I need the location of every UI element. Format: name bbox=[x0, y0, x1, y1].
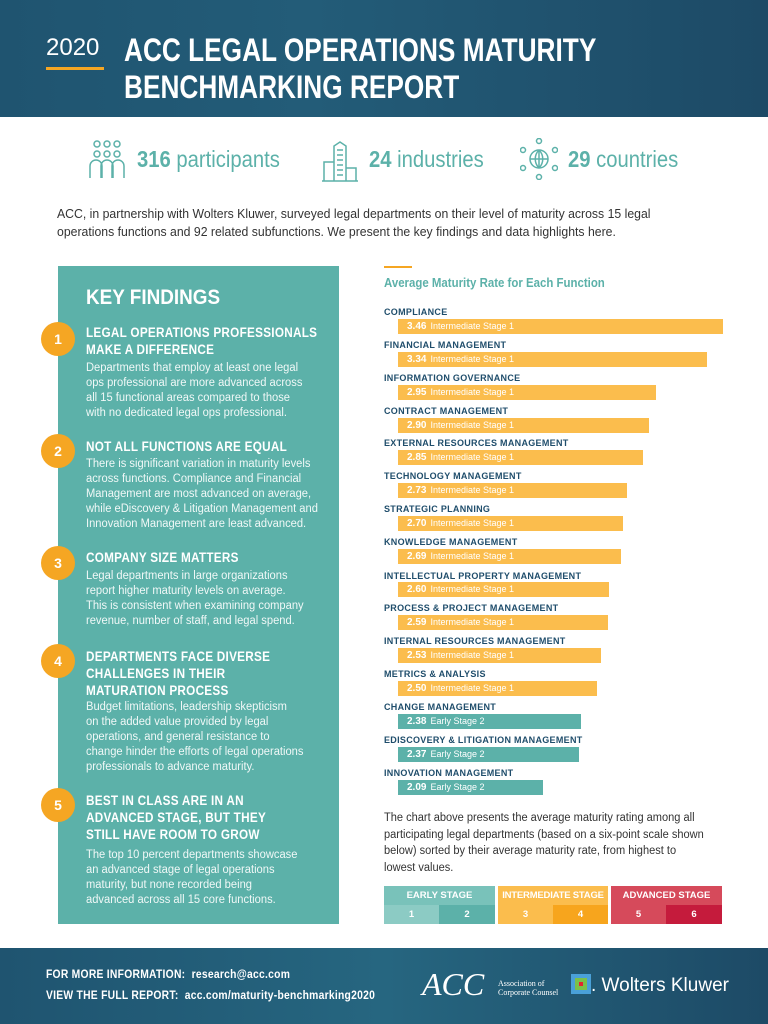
text: 2.53 Intermediate Stage 1 bbox=[407, 650, 514, 661]
panel: key findings: Innovation Management are least advanced. bbox=[86, 518, 306, 530]
text: 2.73 Intermediate Stage 1 bbox=[407, 485, 514, 496]
intro text: ACC, in partnership with Wolters Kluwer, surveyed legal departments on their level of maturity across 15 legal bbox=[57, 207, 650, 221]
text: METRICS & ANALYSIS bbox=[384, 669, 486, 679]
legend: stage scale: 5 bbox=[636, 909, 641, 920]
chart note text: The chart above presents the average maturity rating among all bbox=[384, 812, 695, 824]
panel: key findings: professionals to advance maturity. bbox=[86, 761, 254, 773]
text: PROCESS & PROJECT MANAGEMENT bbox=[384, 603, 558, 613]
text: FINANCIAL MANAGEMENT bbox=[384, 340, 506, 350]
chart note text bbox=[384, 812, 704, 874]
text: INNOVATION MANAGEMENT bbox=[384, 768, 513, 778]
text: 2.37 Early Stage 2 bbox=[407, 749, 484, 760]
legend: stage scale: ADVANCED STAGE bbox=[623, 890, 710, 901]
panel: key findings: report higher maturity levels on average. bbox=[86, 585, 286, 597]
footer contact text: VIEW THE FULL REPORT: acc.com/maturity-benchmarking2020 bbox=[46, 988, 375, 1002]
text: 2.60 Intermediate Stage 1 bbox=[407, 584, 514, 595]
panel: key findings: BEST IN CLASS ARE IN AN bbox=[86, 793, 244, 808]
footer contact text bbox=[46, 967, 375, 1002]
panel: key findings: LEGAL OPERATIONS PROFESSIONALS bbox=[86, 325, 317, 340]
panel: key findings: There is significant variation in maturity levels bbox=[86, 458, 310, 470]
panel: key findings: COMPANY SIZE MATTERS bbox=[86, 550, 239, 565]
stat: countries: 29 countries bbox=[568, 146, 678, 172]
panel: key findings: across functions. Compliance and Financial bbox=[86, 473, 301, 485]
text: 5 bbox=[54, 797, 62, 813]
panel: key findings: while eDiscovery & Litigation Management and bbox=[86, 503, 318, 515]
text: 2.50 Intermediate Stage 1 bbox=[407, 683, 514, 694]
panel: key findings: advanced across all 15 core functions. bbox=[86, 894, 276, 906]
legend: stage scale: EARLY STAGE bbox=[407, 890, 472, 901]
panel: key findings: maturity, but none recorded being bbox=[86, 879, 252, 891]
panel: key findings: Legal departments in large organizations bbox=[86, 570, 288, 582]
logo: Wolters Kluwer: . Wolters Kluwer bbox=[591, 975, 729, 996]
text: COMPLIANCE bbox=[384, 307, 448, 317]
text: TECHNOLOGY MANAGEMENT bbox=[384, 471, 522, 481]
chart note text: below) sorted by their average maturity rate, from highest to bbox=[384, 845, 676, 857]
text: STRATEGIC PLANNING bbox=[384, 504, 490, 514]
text: 3.46 Intermediate Stage 1 bbox=[407, 321, 514, 332]
text: INTELLECTUAL PROPERTY MANAGEMENT bbox=[384, 571, 581, 581]
intro text: operations functions and 92 related subfunctions. We present the key findings and data highlights here. bbox=[57, 225, 616, 239]
icon: globe network bbox=[520, 138, 558, 180]
text: CHANGE MANAGEMENT bbox=[384, 702, 496, 712]
stat: industries: 24 industries bbox=[369, 146, 484, 172]
text: 1 bbox=[54, 331, 62, 347]
text: EDISCOVERY & LITIGATION MANAGEMENT bbox=[384, 735, 583, 745]
legend: stage scale: 4 bbox=[578, 909, 583, 920]
stat: participants: 316 participants bbox=[137, 146, 280, 172]
text: 2.38 Early Stage 2 bbox=[407, 716, 484, 727]
panel: key findings: an advanced stage of legal operations bbox=[86, 864, 275, 876]
legend: stage scale bbox=[384, 886, 722, 924]
chart note text: lowest values. bbox=[384, 862, 453, 874]
panel: key findings: This is consistent when examining company bbox=[86, 600, 304, 612]
panel: key findings: Departments that employ at least one legal bbox=[86, 362, 298, 374]
title bbox=[124, 32, 596, 105]
panel: key findings: with no dedicated legal ops professional. bbox=[86, 407, 287, 419]
text: 2.69 Intermediate Stage 1 bbox=[407, 551, 514, 562]
text: 2 bbox=[54, 443, 62, 459]
panel: key findings: Budget limitations, leadership skepticism bbox=[86, 701, 287, 713]
icon: building bbox=[322, 141, 358, 182]
panel: key findings: Management are most advanced on average, bbox=[86, 488, 311, 500]
panel: key findings: all 15 functional areas compared to those bbox=[86, 392, 290, 404]
footer contact text: FOR MORE INFORMATION: research@acc.com bbox=[46, 967, 290, 981]
logo: ACC: Association of bbox=[498, 979, 544, 988]
text: 2.95 Intermediate Stage 1 bbox=[407, 387, 514, 398]
panel: key findings: MAKE A DIFFERENCE bbox=[86, 342, 214, 357]
text: 3.34 Intermediate Stage 1 bbox=[407, 354, 514, 365]
chart title: Average Maturity Rate for Each Function bbox=[384, 275, 605, 290]
text: 4 bbox=[54, 653, 62, 669]
logo: ACC: ACC bbox=[422, 966, 484, 1002]
text: 2.59 Intermediate Stage 1 bbox=[407, 617, 514, 628]
text: 2.09 Early Stage 2 bbox=[407, 782, 484, 793]
panel: key findings: DEPARTMENTS FACE DIVERSE bbox=[86, 649, 270, 664]
legend: stage scale: 2 bbox=[464, 909, 470, 920]
logo: ACC: Corporate Counsel bbox=[498, 988, 558, 997]
stats row bbox=[89, 138, 678, 182]
year: 2020 bbox=[46, 34, 99, 61]
panel: key findings: ops professional are more advanced across bbox=[86, 377, 302, 389]
legend: stage scale: 6 bbox=[691, 909, 697, 920]
heading: KEY FINDINGS bbox=[86, 286, 220, 309]
panel: key findings: NOT ALL FUNCTIONS ARE EQUAL bbox=[86, 439, 287, 454]
panel: key findings: on the added value provided by legal bbox=[86, 716, 268, 728]
chart note text: participating legal departments (based on a six-point scale shown bbox=[384, 828, 704, 840]
text: EXTERNAL RESOURCES MANAGEMENT bbox=[384, 438, 569, 448]
panel: key findings: STILL HAVE ROOM TO GROW bbox=[86, 827, 260, 842]
icon: people bbox=[89, 140, 125, 178]
legend: stage scale: 3 bbox=[523, 909, 528, 920]
panel: key findings: revenue, number of staff, and legal spend. bbox=[86, 615, 295, 627]
year bbox=[46, 34, 104, 70]
panel: key findings: CHALLENGES IN THEIR bbox=[86, 666, 225, 681]
panel: key findings: change hinder the efforts of legal operations bbox=[86, 746, 303, 758]
text: 2.85 Intermediate Stage 1 bbox=[407, 452, 514, 463]
panel: key findings: The top 10 percent departments showcase bbox=[86, 849, 297, 861]
text: 3 bbox=[54, 555, 62, 571]
legend: stage scale: 1 bbox=[409, 909, 414, 920]
text: CONTRACT MANAGEMENT bbox=[384, 406, 508, 416]
text: 2.70 Intermediate Stage 1 bbox=[407, 518, 514, 529]
panel: key findings: MATURATION PROCESS bbox=[86, 683, 229, 698]
text: KNOWLEDGE MANAGEMENT bbox=[384, 537, 518, 547]
title: BENCHMARKING REPORT bbox=[124, 69, 459, 105]
panel: key findings: ADVANCED STAGE, BUT THEY bbox=[86, 810, 266, 825]
legend: stage scale: INTERMEDIATE STAGE bbox=[502, 890, 604, 901]
intro text bbox=[57, 207, 650, 239]
logo: ACC bbox=[420, 966, 558, 1002]
text: INTERNAL RESOURCES MANAGEMENT bbox=[384, 636, 566, 646]
title: ACC LEGAL OPERATIONS MATURITY bbox=[124, 32, 596, 68]
panel: key findings: operations, and general resistance to bbox=[86, 731, 270, 743]
header banner bbox=[0, 0, 768, 117]
footer bbox=[0, 948, 768, 1024]
text: 2.90 Intermediate Stage 1 bbox=[407, 420, 514, 431]
text: INFORMATION GOVERNANCE bbox=[384, 373, 520, 383]
panel: key findings bbox=[58, 266, 339, 924]
